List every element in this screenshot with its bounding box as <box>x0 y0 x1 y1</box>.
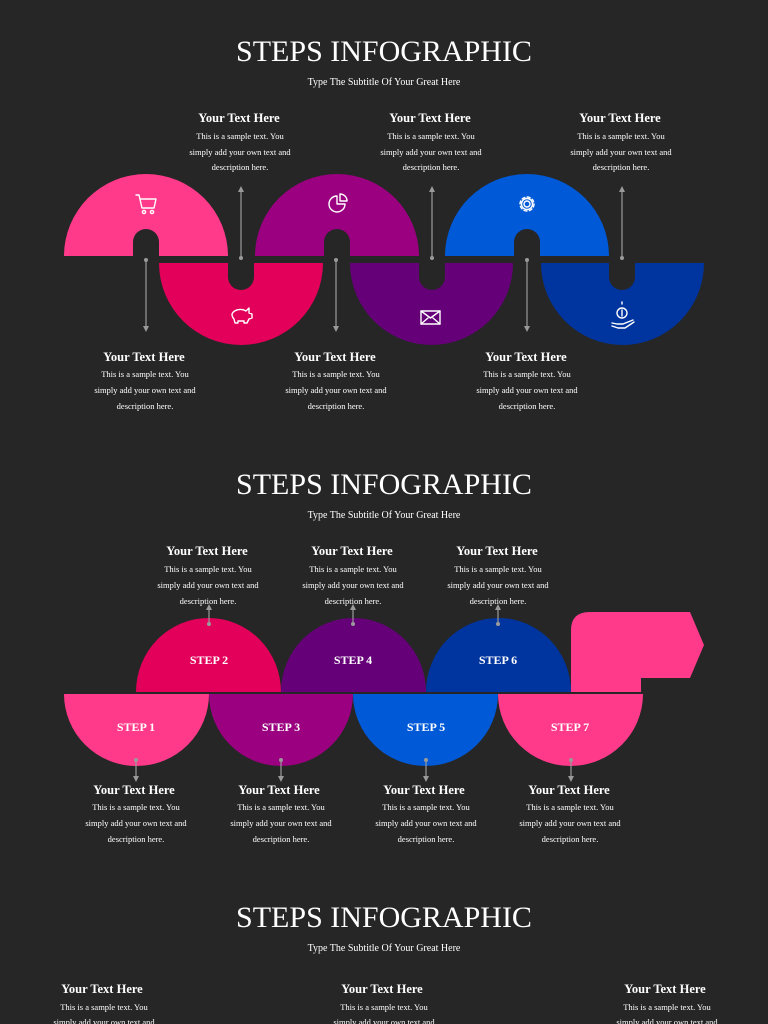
text block: bottom 1: description here. <box>117 401 173 411</box>
text block: bottom 3: simply add your own text and <box>476 385 578 395</box>
text block: step 4: This is a sample text. You <box>309 564 398 574</box>
text block: step 1: This is a sample text. You <box>92 802 181 812</box>
text block: section 3 right: This is a sample text. You <box>623 1002 712 1012</box>
text block: section 3 left: Your Text Here <box>61 982 143 996</box>
text block: step 4: Your Text Here <box>311 544 393 558</box>
text block: step 1: simply add your own text and <box>85 818 187 828</box>
text block: step 6: simply add your own text and <box>447 580 549 590</box>
text block: top 3: description here. <box>593 162 649 172</box>
arrow: step 3 <box>279 758 283 779</box>
arch: violet with mail <box>350 263 513 345</box>
text block: top 2: This is a sample text. You <box>387 131 476 141</box>
text block: step 3: simply add your own text and <box>230 818 332 828</box>
text block: bottom 3: description here. <box>499 401 555 411</box>
text block: step 7: Your Text Here <box>528 783 610 797</box>
text block: step 3: This is a sample text. You <box>237 802 326 812</box>
step 2: STEP 2 <box>190 653 228 667</box>
text block: step 1: description here. <box>108 834 164 844</box>
text block: bottom 1: simply add your own text and <box>94 385 196 395</box>
text block: bottom 2: simply add your own text and <box>285 385 387 395</box>
text block: section 3 right <box>616 982 718 1024</box>
text block: step 5: This is a sample text. You <box>382 802 471 812</box>
text block: bottom 1: Your Text Here <box>103 350 185 364</box>
arch: crimson with piggy <box>159 263 323 345</box>
subtitle 3: Type The Subtitle Of Your Great Here <box>308 943 461 954</box>
text block: step 1: Your Text Here <box>93 783 175 797</box>
step 4: STEP 4 <box>334 653 372 667</box>
arrow: step 4 <box>351 607 355 626</box>
step 7: STEP 7 <box>551 720 589 734</box>
icon: piggy bank <box>232 308 252 323</box>
text block: step 5: simply add your own text and <box>375 818 477 828</box>
text block: top 2 <box>380 111 482 172</box>
text block: step 2: description here. <box>180 596 236 606</box>
text block: step 7: simply add your own text and <box>519 818 621 828</box>
icon: cart <box>136 195 156 214</box>
text block: top 2: description here. <box>403 162 459 172</box>
text block: bottom 1 <box>94 350 196 411</box>
text block: step 7: description here. <box>542 834 598 844</box>
text block: step 2 <box>157 544 259 606</box>
step 7 <box>498 694 643 766</box>
step 5: STEP 5 <box>407 720 445 734</box>
step 2 <box>136 618 281 692</box>
text block: step 4: simply add your own text and <box>302 580 404 590</box>
arch: pink with cart <box>64 174 228 256</box>
text block: bottom 2: This is a sample text. You <box>292 369 381 379</box>
text block: step 7 <box>519 783 621 844</box>
arch: blue with gear <box>445 174 609 256</box>
arrow: bottom 2 <box>334 258 338 329</box>
subtitle 2: Type The Subtitle Of Your Great Here <box>308 510 461 521</box>
text block: top 1 <box>189 111 291 172</box>
arrow: bottom 3 <box>525 258 529 329</box>
icon: gear <box>520 197 534 211</box>
arrow: top 2 <box>430 189 434 260</box>
text block: section 3 right: Your Text Here <box>624 982 706 996</box>
text block: step 1 <box>85 783 187 844</box>
arrow: step 2 <box>207 607 211 626</box>
text block: top 1: This is a sample text. You <box>196 131 285 141</box>
step 5 <box>353 694 498 766</box>
text block: top 3: simply add your own text and <box>570 147 672 157</box>
text block: section 3 left: This is a sample text. You <box>60 1002 149 1012</box>
arrow: step 5 <box>424 758 428 779</box>
step 4 <box>281 618 426 692</box>
text block: top 2: Your Text Here <box>389 111 471 125</box>
text block: step 7: This is a sample text. You <box>526 802 615 812</box>
text block: step 6: description here. <box>470 596 526 606</box>
arrow: top 3 <box>620 189 624 260</box>
text block: step 4: description here. <box>325 596 381 606</box>
arrow: bottom 1 <box>144 258 148 329</box>
arch: purple with pie <box>255 174 419 256</box>
text block: top 1: description here. <box>212 162 268 172</box>
text block: step 6: This is a sample text. You <box>454 564 543 574</box>
step 3: STEP 3 <box>262 720 300 734</box>
text block: bottom 3 <box>476 350 578 411</box>
arrow: step 1 <box>134 758 138 779</box>
text block: bottom 3: Your Text Here <box>485 350 567 364</box>
title 2: STEPS INFOGRAPHIC <box>236 468 532 501</box>
step 6 <box>426 618 571 692</box>
text block: top 3: This is a sample text. You <box>577 131 666 141</box>
text block: step 6: Your Text Here <box>456 544 538 558</box>
arrow: step 6 <box>496 607 500 626</box>
step 1 <box>64 694 209 766</box>
icon: mail <box>421 311 440 324</box>
text block: step 3: description here. <box>253 834 309 844</box>
text block: section 3 middle: Your Text Here <box>341 982 423 996</box>
text block: step 2: Your Text Here <box>166 544 248 558</box>
step 6: STEP 6 <box>479 653 517 667</box>
arrow: step 7 <box>569 758 573 779</box>
text block: step 5: Your Text Here <box>383 783 465 797</box>
arch: navy with money <box>541 263 704 345</box>
text block: step 2: This is a sample text. You <box>164 564 253 574</box>
text block: bottom 1: This is a sample text. You <box>101 369 190 379</box>
text block: top 1: simply add your own text and <box>189 147 291 157</box>
text block: step 3: Your Text Here <box>238 783 320 797</box>
text block: step 4 <box>302 544 404 606</box>
text block: step 5 <box>375 783 477 844</box>
text block: bottom 2: description here. <box>308 401 364 411</box>
text block: step 6 <box>447 544 549 606</box>
title 1: STEPS INFOGRAPHIC <box>236 35 532 68</box>
arrow shape <box>571 612 704 692</box>
subtitle 1: Type The Subtitle Of Your Great Here <box>308 77 461 88</box>
text block: top 3 <box>570 111 672 172</box>
icon: pie chart <box>329 194 347 212</box>
text block: section 3 left <box>53 982 155 1024</box>
text block: bottom 3: This is a sample text. You <box>483 369 572 379</box>
text block: section 3 middle: This is a sample text. You <box>340 1002 429 1012</box>
step 3 <box>209 694 353 766</box>
text block: step 3 <box>230 783 332 844</box>
text block: bottom 2: Your Text Here <box>294 350 376 364</box>
text block: step 2: simply add your own text and <box>157 580 259 590</box>
step 1: STEP 1 <box>117 720 155 734</box>
text block: top 1: Your Text Here <box>198 111 280 125</box>
text block: top 2: simply add your own text and <box>380 147 482 157</box>
icon: money hand <box>612 302 634 328</box>
text block: step 5: description here. <box>398 834 454 844</box>
title 3: STEPS INFOGRAPHIC <box>236 901 532 934</box>
text block: section 3 middle <box>333 982 435 1024</box>
arrow: top 1 <box>239 189 243 260</box>
text block: top 3: Your Text Here <box>579 111 661 125</box>
text block: bottom 2 <box>285 350 387 411</box>
